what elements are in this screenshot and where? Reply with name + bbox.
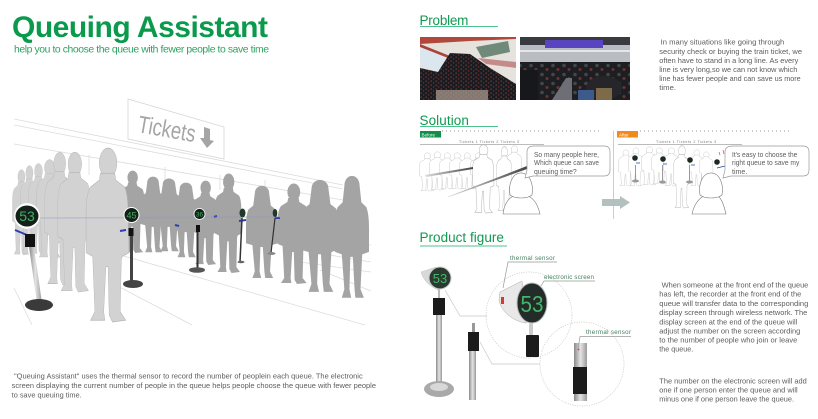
stanchion: 45: 45 <box>126 210 137 220</box>
heading: problem: Problem <box>420 13 469 28</box>
product text: the queue. <box>659 344 693 354</box>
panel: before <box>419 131 610 214</box>
viewer <box>503 173 540 214</box>
stanchion: 53: 53 <box>19 208 35 224</box>
stanchion: 45 <box>123 208 143 288</box>
problem text: In many situations like going through <box>661 38 784 46</box>
people: rear queue <box>120 171 369 298</box>
stanchion: 36 <box>189 208 205 273</box>
problem text: line has fewer people and can save us more <box>659 74 801 83</box>
pole detail <box>468 323 479 400</box>
heading: problem <box>420 13 498 28</box>
photo: station hall crowd <box>420 37 516 100</box>
label: thermal sensor lower: thermal sensor <box>586 329 631 336</box>
after tag <box>617 131 638 138</box>
viewer <box>692 173 726 214</box>
problem text: often have to stand in a long line. As every <box>659 56 799 65</box>
speech bubble: queuing time? <box>534 167 577 176</box>
product text: one if one person enter the queue and will <box>659 386 798 394</box>
label: electronic screen: electronic screen <box>544 274 595 281</box>
panel: after: Tickets 1 Tickets 2 Tickets 3 <box>656 140 716 144</box>
product text <box>659 280 808 404</box>
full stand <box>421 267 454 397</box>
attention marks <box>719 150 729 158</box>
label: thermal sensor: thermal sensor <box>510 255 555 262</box>
product text: When someone at the front end of the queue <box>662 280 808 290</box>
product text: has left, the recorder at the front end of the <box>659 290 801 298</box>
speech bubble: Which queue can save <box>534 158 599 167</box>
enlarged sensor <box>573 343 587 401</box>
arrow: before to after <box>602 196 630 209</box>
speech bubble: So many people here, <box>534 150 599 159</box>
crowd sketch <box>618 146 713 208</box>
speech bubble: It's easy to choose the <box>732 150 797 159</box>
heading: product figure: Product figure <box>420 230 504 245</box>
queue description <box>12 372 376 400</box>
speech bubble <box>723 146 809 178</box>
subtitle: help you to choose the queue with fewer people to save time <box>14 44 269 56</box>
product text: display screen through wireless network. The <box>659 308 807 317</box>
product text: queue will transfer data to the corresponding <box>659 299 808 308</box>
queue description: to save queuing time. <box>12 390 82 400</box>
enlarged screen: 53 <box>520 291 544 317</box>
problem text: time. <box>659 83 676 92</box>
panel: before: Tickets 1 Tickets 2 Tickets 3 <box>459 140 519 144</box>
label: thermal sensor lower <box>578 329 631 349</box>
ticket sign: Tickets <box>136 111 198 148</box>
speech bubble: right queue to save my <box>732 158 800 167</box>
label: thermal sensor <box>503 255 557 288</box>
after tag: After <box>619 132 629 137</box>
queue belts <box>15 216 280 235</box>
product text: display screen at the end of the queue will <box>659 318 798 326</box>
problem text: security check or buying the train ticket, we <box>659 47 802 56</box>
photo: security check line <box>520 37 630 100</box>
stanchion: far <box>238 208 277 263</box>
product text: The number on the electronic screen will add <box>659 376 807 386</box>
title: Queuing Assistant <box>12 11 268 44</box>
problem text: line is very long,so we can not know which <box>659 65 797 74</box>
icon: down arrow <box>200 127 214 148</box>
people: front queue <box>12 148 129 322</box>
full stand: 53 <box>433 271 447 286</box>
before tag <box>420 131 441 138</box>
label: electronic screen <box>541 274 595 286</box>
heading: solution <box>420 113 498 128</box>
zoom circles and connectors <box>445 272 624 406</box>
product text: adjust the number on the screen according <box>659 326 800 336</box>
crowd sketch <box>419 145 522 213</box>
stanchion: 53 <box>14 203 53 311</box>
product text: minus one if one person leave the queue. <box>659 394 794 404</box>
product text: to the number of people who join or leave <box>659 336 797 344</box>
problem text <box>659 38 802 92</box>
queue description: "Queuing Assistant" uses the thermal sensor to record the number of peoplein each queue. The electronic <box>14 372 363 380</box>
queue illustration <box>12 99 371 325</box>
enlarged screen <box>499 281 547 357</box>
product figure <box>421 255 631 406</box>
speech bubble <box>525 146 610 178</box>
before tag: Before <box>422 132 435 137</box>
heading: solution: Solution <box>420 113 470 128</box>
ticket sign <box>128 99 224 159</box>
mini stanchions <box>632 150 729 184</box>
stanchion: 36: 36 <box>196 212 203 218</box>
panel: after <box>617 131 809 214</box>
queue description: screen displaying the current number of people in the queue helps people choose the queue with fewer people <box>12 381 376 390</box>
speech bubble: time. <box>732 167 747 176</box>
